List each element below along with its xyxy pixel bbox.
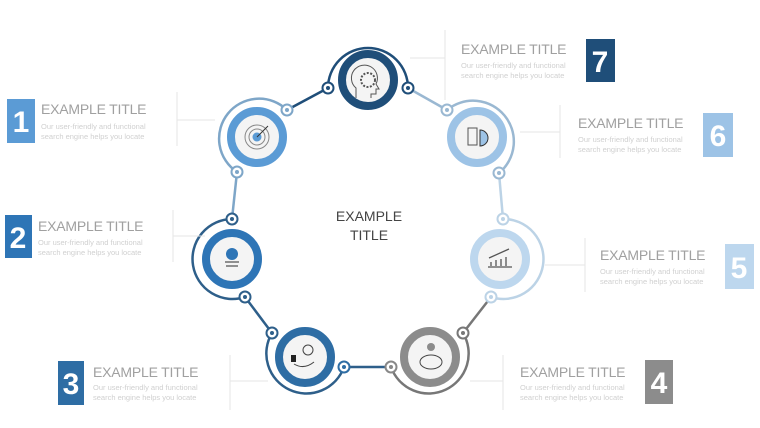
leader lines — [173, 30, 585, 410]
node 2 — [193, 214, 258, 302]
panel 5: EXAMPLE TITLE — [600, 247, 705, 263]
node 6 — [442, 101, 514, 178]
panel 7: 7 — [592, 46, 608, 79]
node 3 — [266, 328, 350, 394]
panel 2: Our user-friendly and functional — [38, 238, 143, 247]
node 4 — [386, 328, 469, 394]
node 1 — [219, 99, 292, 178]
panel 5: search engine helps you locate — [600, 277, 703, 286]
panel 3 — [58, 361, 198, 405]
panel 6: search engine helps you locate — [578, 145, 681, 154]
panel 6: EXAMPLE TITLE — [578, 115, 683, 131]
node 5 — [474, 214, 543, 302]
panel 1: Our user-friendly and functional — [41, 122, 146, 131]
center title — [336, 208, 402, 243]
panel 5 — [600, 244, 754, 289]
panel 6 — [578, 113, 733, 157]
panel 5: 5 — [731, 252, 747, 285]
panel 2: search engine helps you locate — [38, 248, 141, 257]
panel 1: search engine helps you locate — [41, 132, 144, 141]
panel 7: Our user-friendly and functional — [461, 61, 566, 70]
center title: EXAMPLE — [336, 208, 402, 224]
panel 4: Our user-friendly and functional — [520, 383, 625, 392]
panel 7: EXAMPLE TITLE — [461, 41, 566, 57]
panel 2 — [5, 215, 143, 258]
panel 7: search engine helps you locate — [461, 71, 564, 80]
panel 1 — [7, 99, 146, 143]
panel 5: Our user-friendly and functional — [600, 267, 705, 276]
panel 6: Our user-friendly and functional — [578, 135, 683, 144]
panel 3: EXAMPLE TITLE — [93, 364, 198, 380]
panel 3: search engine helps you locate — [93, 393, 196, 402]
panel 4 — [520, 360, 673, 404]
panel 1: 1 — [13, 106, 29, 139]
panel 4: search engine helps you locate — [520, 393, 623, 402]
center title: TITLE — [350, 227, 388, 243]
connector lines — [232, 88, 503, 367]
panel 4: 4 — [651, 367, 668, 400]
panel 3: 3 — [63, 368, 79, 401]
panel 7 — [461, 39, 615, 82]
node 7 — [322, 48, 414, 106]
panel 2: EXAMPLE TITLE — [38, 218, 143, 234]
panel 1: EXAMPLE TITLE — [41, 101, 146, 117]
panel 2: 2 — [10, 222, 26, 255]
panel 3: Our user-friendly and functional — [93, 383, 198, 392]
panel 6: 6 — [710, 120, 726, 153]
panel 4: EXAMPLE TITLE — [520, 364, 625, 380]
